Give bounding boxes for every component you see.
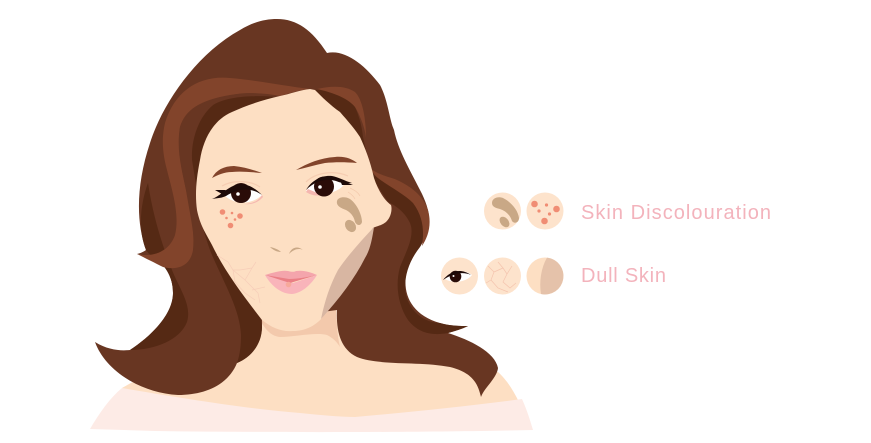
icon: cracked skin [484, 258, 521, 294]
right eye [306, 173, 360, 199]
woman illustration [95, 19, 522, 420]
hair highlight right [370, 168, 430, 246]
icon: eye [441, 258, 478, 294]
discolouration marks [337, 197, 362, 234]
shoulders and neck [120, 320, 522, 420]
right eyebrow [296, 157, 357, 170]
icon: red spots [526, 192, 564, 230]
hair mid layer left [179, 93, 277, 250]
row: dull skin [441, 258, 666, 294]
hair highlight top right [317, 87, 366, 138]
lips [265, 271, 317, 294]
icon: pigment marks [484, 192, 521, 230]
label: Dull Skin: Dull Skin [581, 265, 666, 287]
neck shadow [258, 300, 340, 347]
left eyebrow [212, 166, 262, 178]
dry skin cracks [217, 255, 265, 303]
freckles [220, 209, 243, 228]
hair shadow left [130, 183, 188, 350]
dull skin patch [321, 227, 374, 319]
hair highlight left [137, 78, 310, 268]
hair shadow along face [192, 95, 277, 363]
left eye [212, 182, 263, 204]
row: skin discolouration [484, 192, 771, 230]
blouse [90, 388, 533, 432]
hair back [95, 19, 498, 397]
label: Skin Discolouration: Skin Discolouration [581, 202, 771, 224]
face [196, 89, 391, 331]
nose [270, 247, 303, 254]
icon: dull skin tone [526, 258, 564, 294]
hair shadow right [315, 90, 468, 334]
